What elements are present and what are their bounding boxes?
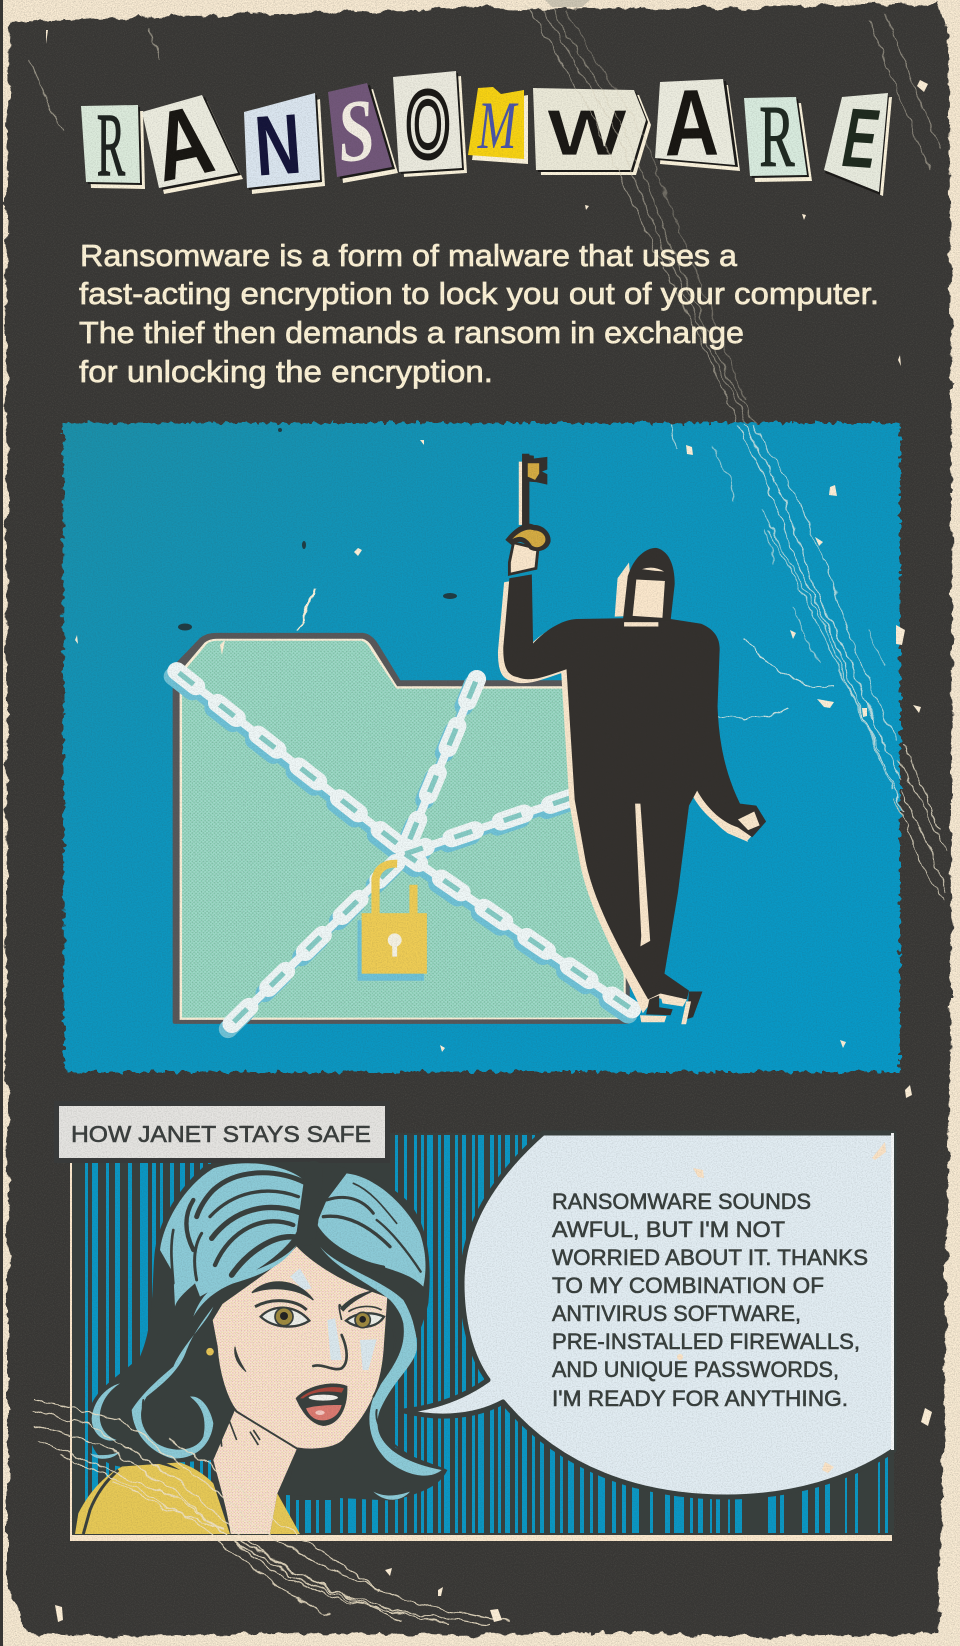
nose bbox=[313, 1335, 347, 1369]
hair side highlights bbox=[90, 1297, 442, 1500]
comic panel: Janet frame with striped background bbox=[70, 1133, 894, 1541]
letter tile A: A bbox=[663, 71, 720, 176]
speech text: I'M READY FOR ANYTHING. bbox=[552, 1386, 848, 1411]
letter tile W bbox=[533, 88, 651, 175]
letter tile E: E bbox=[840, 90, 881, 186]
mouth bbox=[296, 1383, 347, 1426]
free hand bbox=[738, 812, 760, 830]
letter tile R: R bbox=[97, 96, 125, 195]
intro text: Ransomware is a form of malware that uses a bbox=[80, 238, 738, 273]
letter tile M bbox=[468, 87, 528, 164]
face bbox=[212, 1245, 388, 1450]
figure cream shadow bbox=[498, 578, 761, 1013]
caption: How Janet stays safe bbox=[54, 1101, 390, 1163]
letter tile R bbox=[744, 87, 812, 185]
speech text: AND UNIQUE PASSWORDS, bbox=[552, 1357, 839, 1382]
speech text: RANSOMWARE SOUNDS bbox=[552, 1189, 811, 1214]
speech text: WORRIED ABOUT IT. THANKS bbox=[552, 1245, 868, 1270]
hair dark mass bbox=[88, 1162, 447, 1501]
speech text: ANTIVIRUS SOFTWARE, bbox=[552, 1301, 801, 1326]
feet bbox=[640, 995, 687, 1022]
hair crown highlights bbox=[160, 1163, 426, 1353]
intro text: The thief then demands a ransom in exchange bbox=[79, 315, 744, 350]
figure body bbox=[503, 574, 766, 999]
speech text: PRE-INSTALLED FIREWALLS, bbox=[552, 1329, 860, 1354]
face highlights bbox=[290, 1268, 377, 1370]
bubble specks bbox=[677, 1142, 886, 1473]
page edge marks and specks bbox=[55, 1408, 932, 1622]
intro text: for unlocking the encryption. bbox=[79, 354, 493, 389]
intro text: fast-acting encryption to lock you out of your computer. bbox=[79, 276, 879, 311]
letter tile W: W bbox=[547, 96, 628, 169]
raised hand and key bbox=[505, 454, 551, 574]
Janet portrait bbox=[75, 1162, 447, 1534]
speech text bbox=[552, 1189, 868, 1411]
letter tile N bbox=[244, 93, 325, 194]
speech bubble bbox=[404, 1133, 894, 1497]
letter tile S: S bbox=[333, 80, 379, 181]
yellow blouse bbox=[75, 1458, 300, 1534]
letter tile O bbox=[393, 71, 467, 177]
letter tile A bbox=[655, 71, 740, 176]
padlock bbox=[358, 864, 427, 981]
scratches over lower left bbox=[32, 1400, 510, 1625]
letter tile R: R bbox=[759, 87, 795, 185]
leg slit bbox=[635, 804, 650, 946]
folder bbox=[175, 635, 628, 1022]
letter tile N: N bbox=[252, 96, 304, 194]
letter tile M: M bbox=[477, 87, 519, 163]
panel: blue illustration background bbox=[63, 423, 900, 1072]
caption: How Janet stays safe: HOW JANET STAYS SAFE bbox=[71, 1121, 371, 1147]
chains bbox=[173, 671, 632, 1029]
earring and ear details bbox=[206, 1347, 260, 1447]
speech text: TO MY COMBINATION OF bbox=[552, 1273, 824, 1298]
speech text: AWFUL, BUT I'M NOT bbox=[552, 1217, 785, 1242]
letter tile A: A bbox=[144, 84, 222, 202]
hood and face bbox=[615, 562, 634, 617]
blue vertical stripes bbox=[85, 1135, 888, 1533]
hair lower dark strands bbox=[105, 1330, 433, 1467]
letter tile O: O bbox=[407, 74, 449, 177]
thief figure bbox=[498, 548, 766, 1024]
title: RANSOMWARE ransom-note letters bbox=[81, 71, 892, 202]
letter tile S bbox=[328, 80, 398, 183]
letter tile E bbox=[824, 90, 892, 196]
eyes and brows bbox=[252, 1282, 384, 1328]
illustration: folder, chains, padlock and thief bbox=[173, 454, 766, 1029]
paper scratches and specks over the blue panel bbox=[298, 424, 948, 900]
scratches across the dark header bbox=[30, 5, 940, 424]
letter tile R bbox=[81, 96, 145, 195]
intro text bbox=[79, 238, 879, 389]
neck bbox=[213, 1410, 297, 1534]
